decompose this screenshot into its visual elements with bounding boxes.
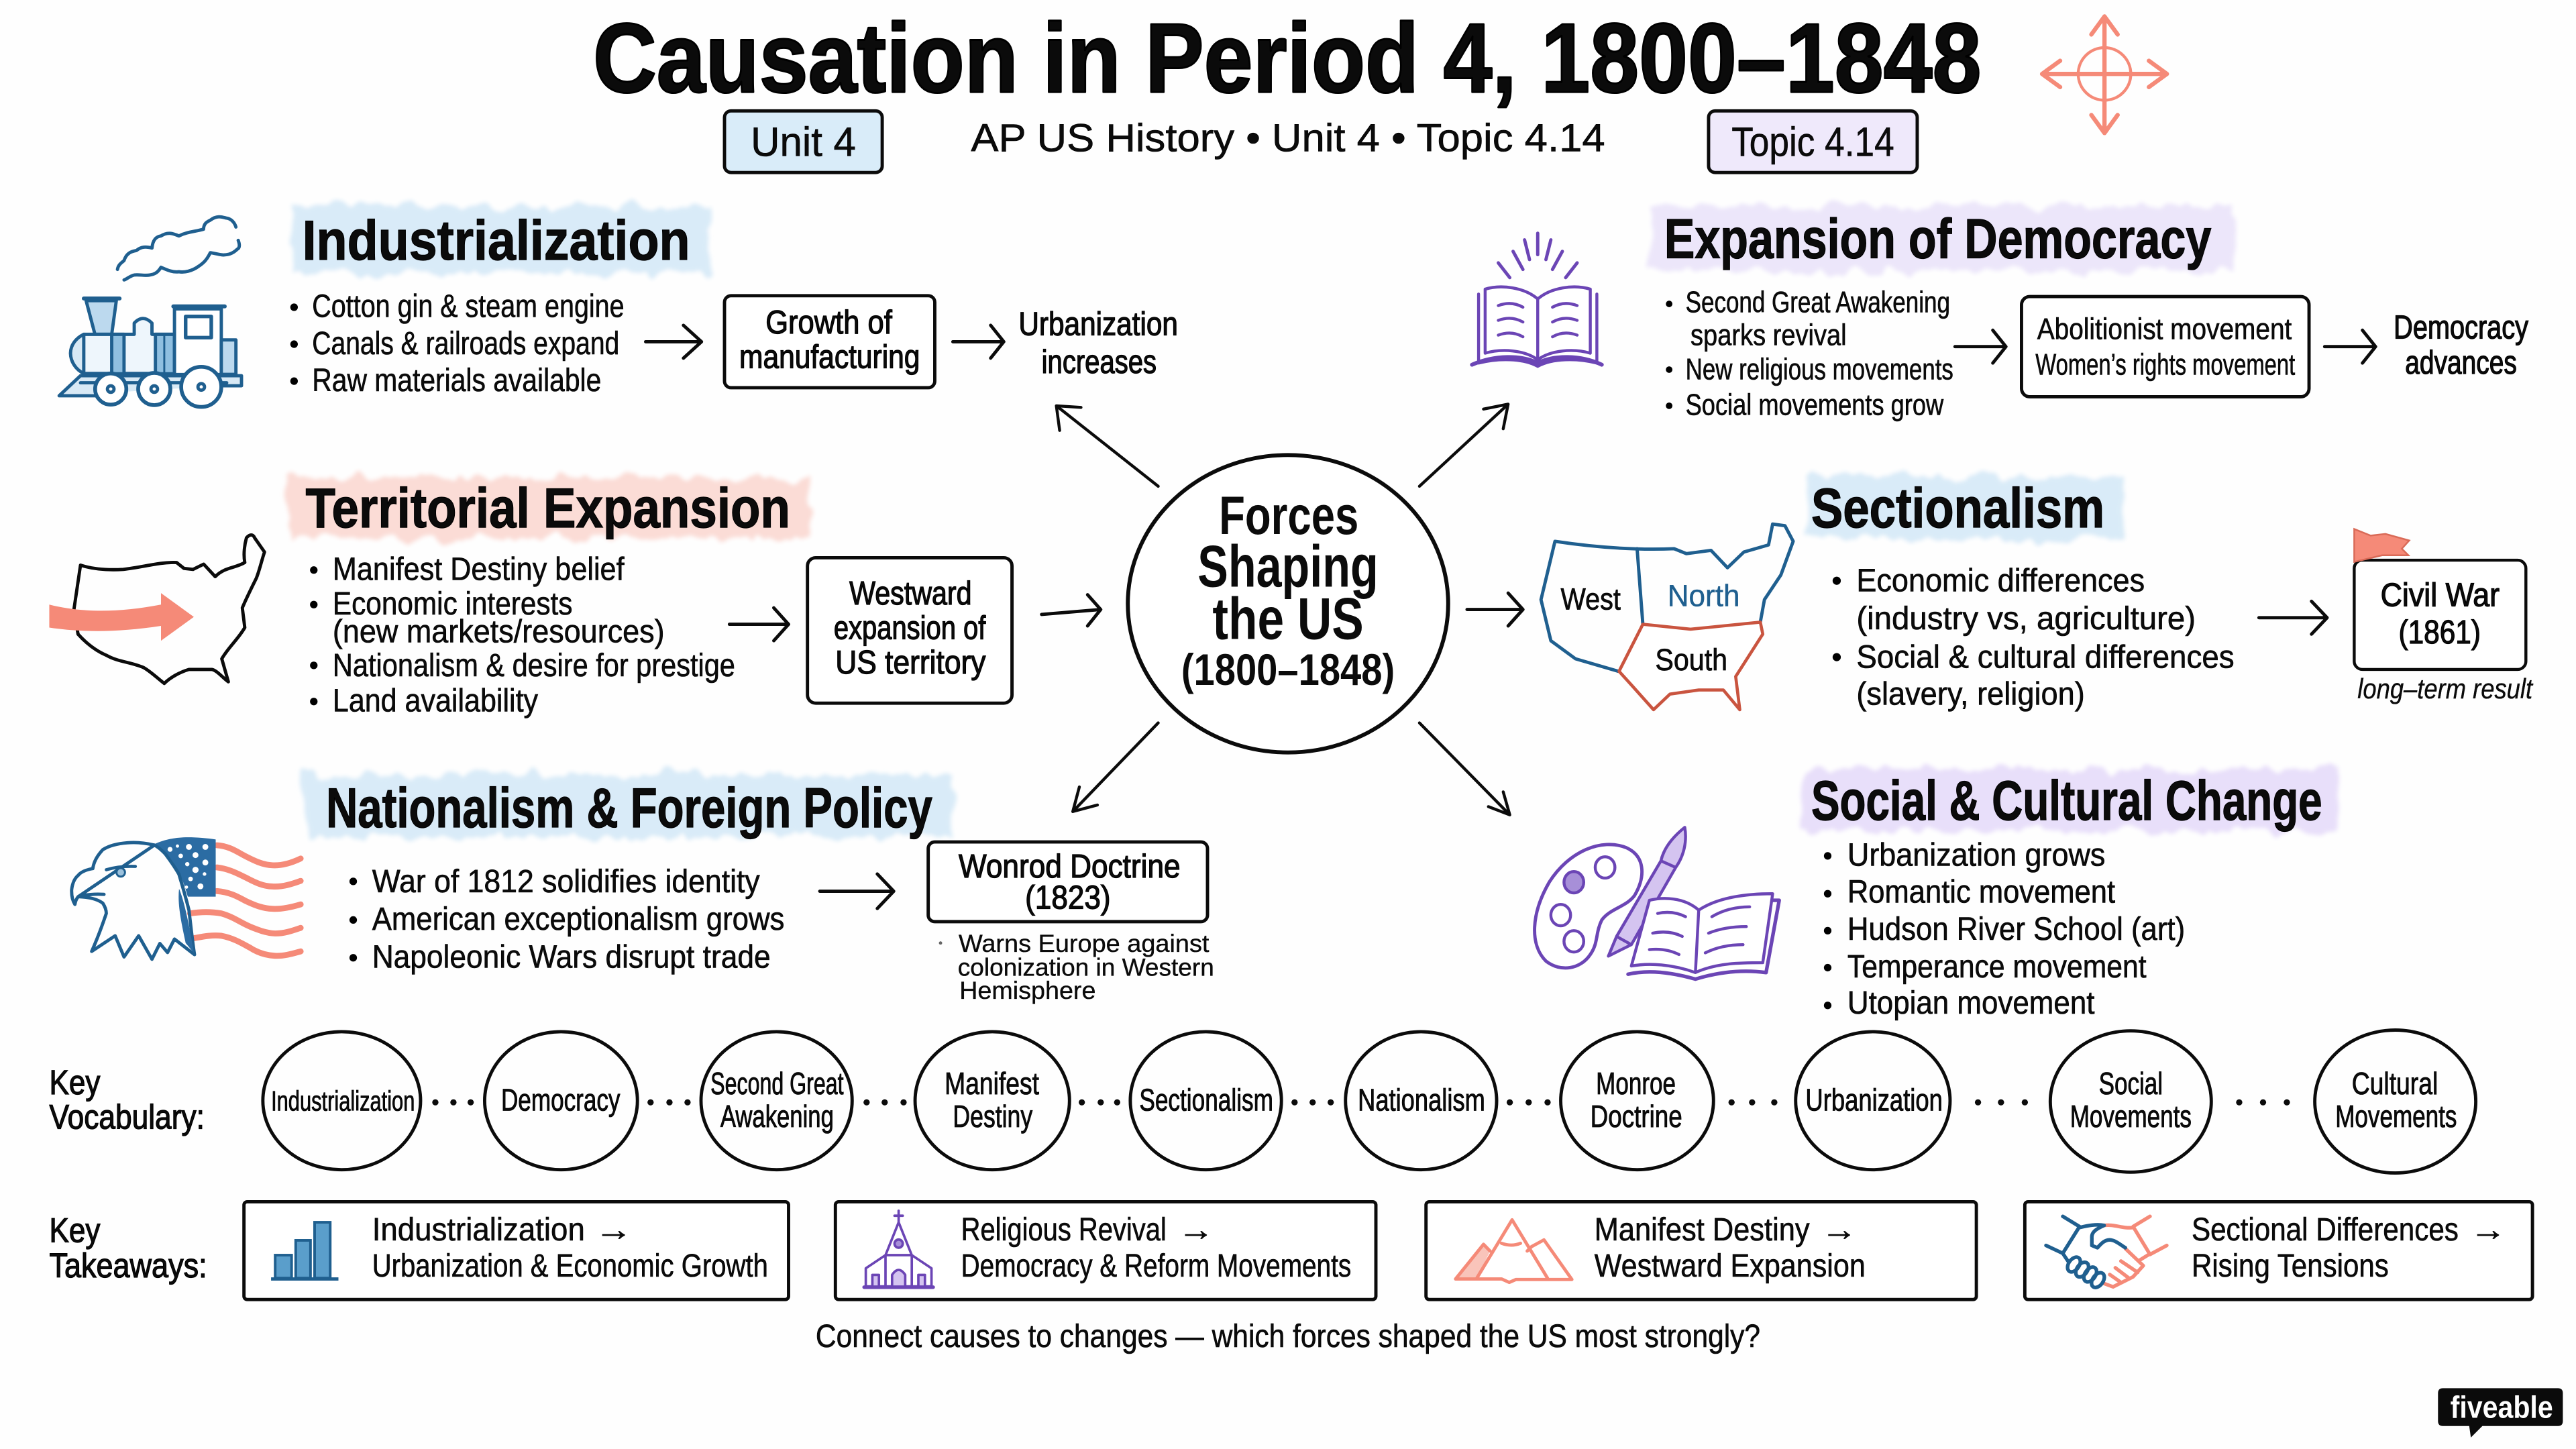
term: Monroe Doctrine: [1561, 1032, 1713, 1170]
term: Manifest Destiny: Manifest: [945, 1066, 1039, 1101]
term: Sectionalism: Sectionalism: [1139, 1083, 1273, 1118]
term: Manifest Destiny: Destiny: [953, 1099, 1033, 1134]
bullet list: [350, 864, 784, 975]
takeaway: Sectional Differences: Rising Tensions: [2192, 1248, 2389, 1284]
heading: Social & Cultural Change: [1811, 769, 2322, 832]
term: Nationalism: [1346, 1032, 1497, 1170]
label: Key Takeaways: Takeaways:: [49, 1246, 207, 1285]
label: Key Takeaways: [49, 1210, 207, 1285]
heading highlight: [292, 205, 710, 273]
bullet list: [1824, 838, 2185, 1021]
arrow: [1042, 595, 1101, 626]
outcome: Democracy advances: Democracy: [2394, 309, 2528, 345]
key vocabulary row: [49, 1030, 2476, 1173]
title: Causation in Period 4, 1800–1848: [593, 3, 1981, 113]
icon: handshake: [2046, 1216, 2167, 1290]
bullet list: Temperance movement: [1847, 949, 2147, 985]
heading: Sectionalism: [1811, 477, 2104, 539]
box: Westward expansion of US territory: US territory: [835, 645, 986, 681]
arrow: [1467, 593, 1523, 626]
icon: open book with rays: [1472, 233, 1602, 366]
takeaway: Religious Revival: →: [1178, 1212, 1214, 1248]
icon: sectional map of the US: [1541, 524, 1793, 710]
bullet list: (slavery, religion): [1856, 677, 2085, 712]
panel: Social and Cultural Change: [1535, 769, 2339, 1021]
bullet list: [1833, 564, 2235, 712]
icon: church: [864, 1211, 933, 1287]
bullet list: Economic differences: [1856, 564, 2145, 599]
icon: bar chart: [271, 1222, 338, 1279]
arrow: [645, 325, 702, 358]
arrow: [953, 325, 1004, 358]
bullet list: New religious movements: [1686, 354, 1953, 386]
connector dots: [432, 1099, 2290, 1106]
takeaway: Religious Revival: [835, 1201, 1376, 1299]
heading highlight: [289, 476, 812, 539]
bullet list: [310, 551, 735, 718]
term: Second Great Awakening: Second Great: [710, 1066, 844, 1101]
takeaway: Manifest Destiny: [1426, 1201, 1976, 1299]
panel: Expansion of Democracy: [1472, 205, 2528, 421]
box: Wonrod Doctrine 1823: Wonrod Doctrine: [959, 849, 1181, 885]
bullet list: Social movements grow: [1686, 388, 1943, 421]
panel: Industrialization: [59, 205, 1178, 407]
outcome: Democracy advances: advances: [2405, 345, 2517, 381]
bullet list: [290, 289, 625, 398]
badge: Topic 4.14: Topic 4.14: [1731, 119, 1894, 165]
box: Civil War 1861: Civil War: [2381, 578, 2500, 614]
arrows radiating from center: [1057, 404, 1510, 815]
bullet list: Urbanization grows: [1847, 838, 2105, 873]
takeaway: Industrialization: Industrialization: [372, 1212, 585, 1248]
key takeaways row: [49, 1201, 2532, 1299]
box: Wonrod Doctrine 1823: (1823): [1025, 879, 1111, 916]
term: Social Movements: Social: [2099, 1066, 2163, 1101]
term: Manifest Destiny: [915, 1032, 1069, 1170]
bullet list: (new markets/resources): [333, 614, 665, 650]
heading: Territorial Expansion: [306, 477, 790, 539]
term: Nationalism: Nationalism: [1358, 1083, 1485, 1118]
box: Growth of manufacturing: [724, 296, 934, 388]
bullet list: Cotton gin & steam engine: [312, 289, 625, 325]
term: Social Movements: Movements: [2070, 1099, 2192, 1134]
term: Industrialization: [263, 1032, 421, 1170]
bullet list: American exceptionalism grows: [372, 902, 784, 937]
arrow: [2259, 601, 2327, 634]
term: Democracy: Democracy: [501, 1083, 621, 1118]
bullet list: War of 1812 solidifies identity: [372, 864, 760, 900]
takeaway: Religious Revival: Religious Revival: [961, 1212, 1167, 1248]
note: long-term result: long–term result: [2357, 673, 2534, 704]
takeaway: Industrialization: Urbanization & Economic Growth: [372, 1248, 768, 1284]
bullet list: Utopian movement: [1847, 985, 2094, 1021]
box: Growth of manufacturing: manufacturing: [739, 339, 920, 376]
label: Key Vocabulary: Vocabulary:: [49, 1097, 205, 1136]
panel: Nationalism and Foreign Policy: [72, 773, 1214, 1004]
takeaway: Sectional Differences: [2025, 1201, 2532, 1299]
fiveable logo: [2438, 1388, 2563, 1438]
heading highlight: [1803, 769, 2339, 831]
arrow: [729, 608, 789, 641]
heading: Nationalism & Foreign Policy: [326, 777, 932, 839]
arrow: [2324, 330, 2375, 363]
term: Cultural Movements: Cultural: [2352, 1066, 2438, 1101]
closing prompt: Connect causes to changes — which forces shaped the US most strongly?: [816, 1319, 1760, 1354]
note: Warns Europe: colonization in Western: [958, 954, 1214, 981]
central node: Forces Shaping the US: Shaping: [1197, 533, 1379, 599]
icon: steam train: [59, 217, 241, 407]
bullet list: Romantic movement: [1847, 875, 2115, 910]
central node: Forces Shaping the US: (1800–1848): [1181, 645, 1395, 695]
heading highlight: [306, 773, 951, 837]
takeaway: Manifest Destiny: Manifest Destiny: [1595, 1212, 1810, 1248]
central node: Forces Shaping the US: [1128, 455, 1448, 753]
label: Key Vocabulary: [49, 1063, 205, 1136]
bullet list: Manifest Destiny belief: [333, 551, 625, 587]
term: Urbanization: Urbanization: [1805, 1083, 1943, 1118]
box: Westward expansion of US territory: Westward: [849, 576, 972, 612]
badge: Topic 4.14: [1709, 111, 1917, 172]
panel: Sectionalism: [1467, 476, 2534, 712]
term: Urbanization: [1796, 1032, 1950, 1170]
heading highlight: [1650, 205, 2233, 271]
arrow: [820, 874, 894, 908]
icon: sectional map of the US: West: [1561, 582, 1621, 616]
icon: sectional map of the US: North: [1668, 579, 1739, 613]
term: Social Movements: [2050, 1031, 2211, 1172]
box: Westward expansion of US territory: expansion of: [834, 610, 986, 647]
outcome: Urbanization increases: [1018, 307, 1178, 380]
icon: US map with westward arrow: [49, 535, 264, 684]
term: Second Great Awakening: [701, 1032, 852, 1170]
bullet list: sparks revival: [1690, 319, 1847, 352]
panel: Territorial Expansion: [49, 476, 1101, 718]
outcome: Urbanization increases: increases: [1042, 344, 1157, 380]
note: Warns Europe: Warns Europe against: [959, 930, 1209, 957]
takeaway: Sectional Differences: Sectional Differences: [2192, 1212, 2459, 1248]
box: Abolitionist and Women's rights movements: [2021, 297, 2309, 396]
badge: Unit 4: [724, 111, 882, 172]
bullet list: (industry vs, agriculture): [1856, 601, 2196, 637]
central node: Forces Shaping the US: Forces: [1219, 486, 1358, 546]
outcome: Urbanization increases: Urbanization: [1018, 307, 1178, 343]
box: Westward expansion of US territory: [808, 557, 1012, 703]
bullet list: Napoleonic Wars disrupt trade: [372, 939, 771, 975]
takeaway: Industrialization: [244, 1201, 789, 1299]
box: Abolitionist and Women's rights movements: Abolitionist movement: [2037, 313, 2292, 346]
term: Monroe Doctrine: Monroe: [1596, 1066, 1676, 1101]
bullet list: [1666, 286, 1953, 421]
bullet list: Land availability: [333, 683, 538, 718]
note: Warns Europe: [939, 930, 1214, 1004]
icon: flag: [2354, 529, 2409, 562]
term: Cultural Movements: [2315, 1030, 2476, 1173]
heading highlight: [1807, 476, 2125, 539]
badge: Unit 4: Unit 4: [751, 119, 856, 165]
term: Cultural Movements: Movements: [2335, 1099, 2457, 1134]
icon: palette, brush and book: [1535, 827, 1779, 979]
takeaway: Manifest Destiny: →: [1821, 1212, 1858, 1248]
bullet list: Economic interests: [333, 586, 572, 622]
note: Warns Europe: Hemisphere: [959, 977, 1095, 1004]
term: Sectionalism: [1130, 1032, 1281, 1170]
takeaway: Industrialization: →: [595, 1212, 633, 1248]
box: Civil War 1861: (1861): [2399, 614, 2481, 651]
fiveable logo: fiveable: [2451, 1389, 2553, 1424]
takeaway: Sectional Differences: →: [2470, 1212, 2506, 1248]
icon: eagle and flag: [72, 837, 301, 959]
takeaway: Religious Revival: Democracy & Reform Movements: [961, 1248, 1351, 1284]
term: Second Great Awakening: Awakening: [720, 1099, 834, 1134]
box: Growth of manufacturing: Growth of: [765, 305, 892, 341]
bullet list: Raw materials available: [312, 363, 601, 398]
bullet list: Second Great Awakening: [1686, 286, 1950, 319]
box: Abolitionist and Women's rights movements: Women’s rights movement: [2035, 348, 2295, 381]
bullet list: Hudson River School (art): [1847, 912, 2185, 947]
outcome: Democracy advances: [2394, 309, 2528, 381]
label: Key Takeaways: Key: [49, 1210, 101, 1249]
box: Civil War 1861: [2354, 560, 2526, 669]
icon: mountains: [1456, 1220, 1572, 1283]
subtitle: AP US History • Unit 4 • Topic 4.14: [971, 116, 1605, 160]
takeaway: Manifest Destiny: Westward Expansion: [1595, 1248, 1866, 1284]
icon: sectional map of the US: South: [1655, 643, 1727, 677]
icon: compass arrows: [2042, 16, 2167, 133]
heading: Expansion of Democracy: [1664, 207, 2211, 270]
heading: Industrialization: [303, 209, 690, 272]
term: Industrialization: Industrialization: [271, 1085, 415, 1117]
arrow: [1955, 330, 2006, 363]
central node: Forces Shaping the US: the US: [1212, 586, 1364, 652]
box: Wonrod Doctrine 1823: [928, 842, 1208, 922]
term: Monroe Doctrine: Doctrine: [1591, 1099, 1682, 1134]
bullet list: Nationalism & desire for prestige: [333, 648, 735, 684]
label: Key Vocabulary: Key: [49, 1063, 101, 1102]
bullet list: Social & cultural differences: [1856, 640, 2235, 676]
bullet list: Canals & railroads expand: [312, 326, 619, 362]
term: Democracy: [484, 1032, 637, 1170]
